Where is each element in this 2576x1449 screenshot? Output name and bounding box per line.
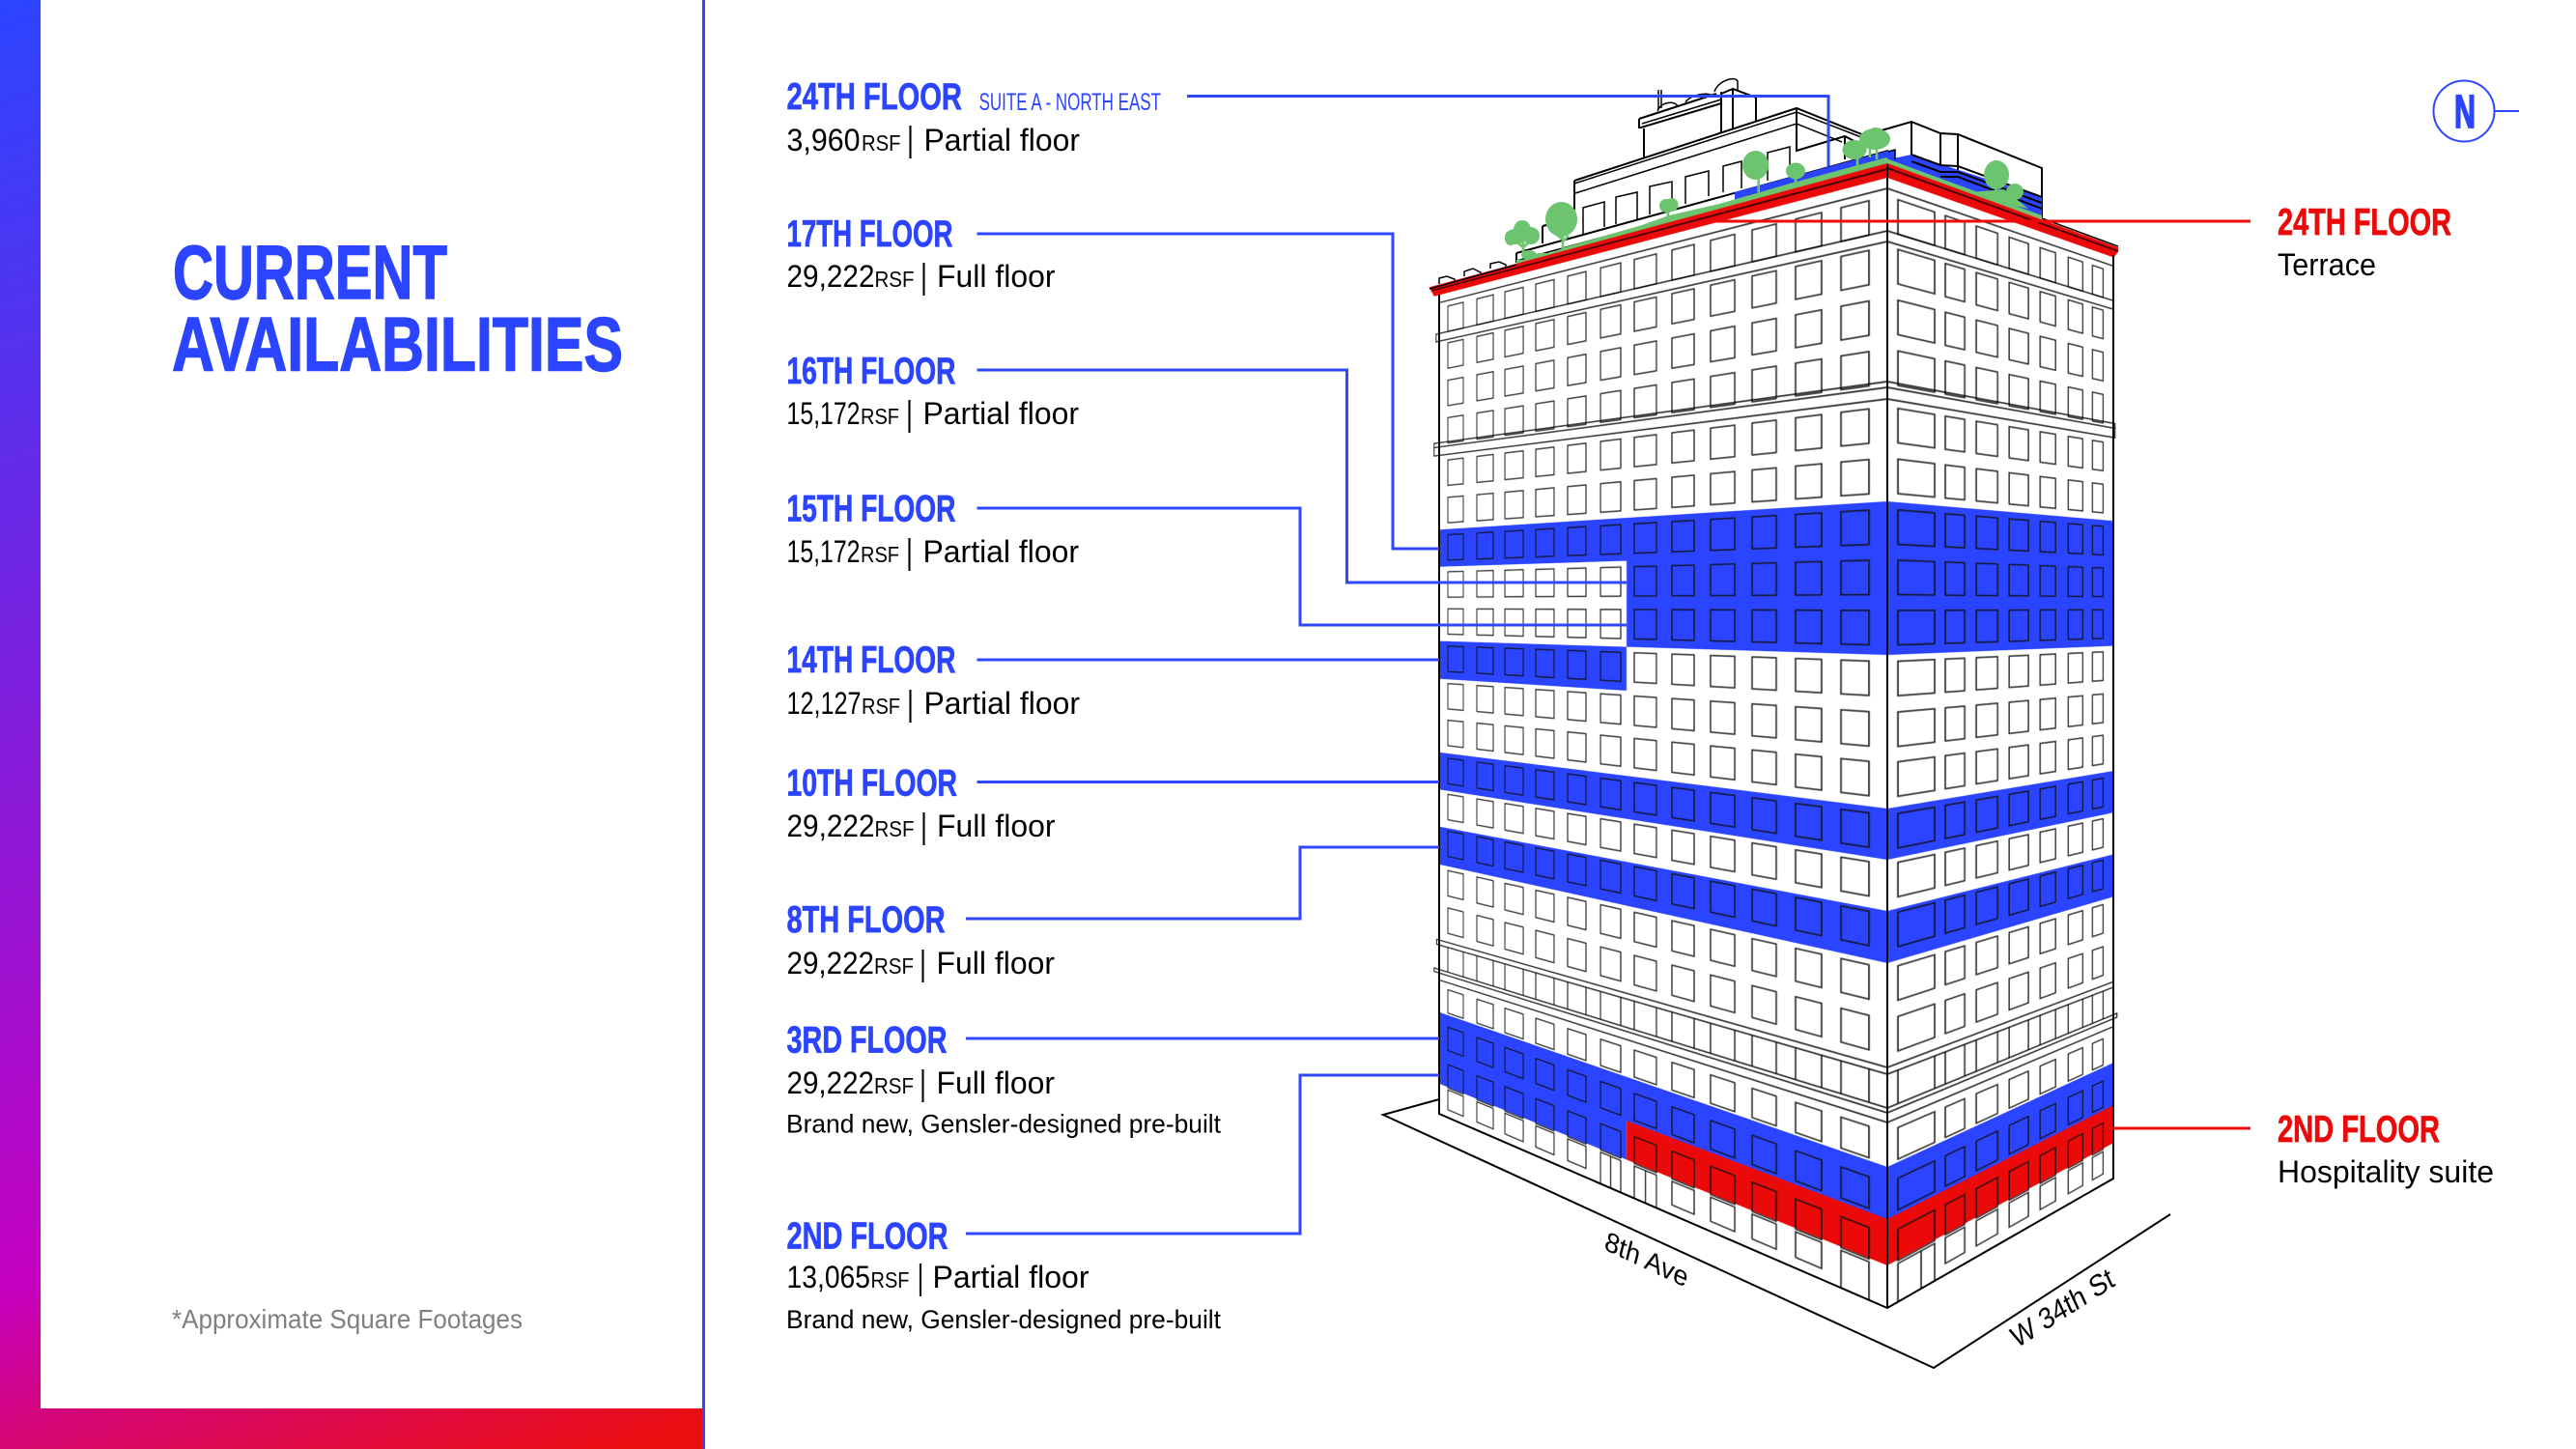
label: 15th floor xyxy=(786,489,1627,625)
3rd floor band xyxy=(1439,1012,1887,1219)
label: 10th floor: 10TH FLOOR xyxy=(786,763,957,804)
west facade (8th Ave) xyxy=(1430,162,1887,1300)
penthouse volume xyxy=(1516,108,1888,263)
ground plan outline xyxy=(1383,1099,2170,1368)
east facade (W 34th St) xyxy=(1887,162,2119,1302)
label: 2nd floor: RSF xyxy=(871,1267,910,1293)
icon: tree xyxy=(1843,140,1866,166)
label: 24th floor suite A xyxy=(786,76,1828,166)
gradient L-shaped frame xyxy=(0,0,703,1449)
2nd floor hospitality suite, red xyxy=(1887,1105,2113,1265)
label: 17th floor xyxy=(786,213,1439,549)
footnote: *Approximate Square Footages xyxy=(172,1304,523,1334)
label: 24th floor terrace xyxy=(1713,202,2451,282)
label: 10th floor: RSF xyxy=(875,816,914,841)
label: 24th floor terrace: Terrace xyxy=(2278,247,2376,282)
icon: tree xyxy=(1742,151,1769,192)
label: 2nd floor: Brand new, Gensler-designed pre-built xyxy=(786,1305,1222,1334)
24th floor suite A terrace, east xyxy=(1748,150,2042,216)
17th floor band xyxy=(1439,501,1887,567)
street label: 8th Ave: 8th Ave xyxy=(1602,1226,1691,1293)
label: 16th floor xyxy=(786,351,1627,582)
title: CURRENT xyxy=(173,229,447,315)
label: 3rd floor: RSF xyxy=(874,1073,914,1098)
icon: tree xyxy=(1545,202,1577,249)
icon: tree xyxy=(1859,128,1890,159)
label: 16th floor: RSF xyxy=(861,404,899,429)
label: 14th floor: 12,127 xyxy=(786,686,862,721)
label: 24th floor suite A: SUITE A - NORTH EAST xyxy=(979,89,1161,116)
west string courses xyxy=(1431,169,1887,1122)
label: 15th floor: Partial floor xyxy=(923,534,1079,569)
label: 8th floor: 29,222 xyxy=(786,946,874,980)
icon: tree xyxy=(1984,160,2009,198)
label: 3rd floor xyxy=(786,1020,1439,1138)
title xyxy=(172,229,623,386)
facade background xyxy=(1887,178,2113,1308)
label: 16th floor: 15,172 xyxy=(786,396,860,431)
label: 8th floor xyxy=(786,847,1439,982)
label: 2nd floor hospitality suite: Hospitality suite xyxy=(2278,1154,2494,1189)
2nd floor hospitality suite, red xyxy=(1627,1121,1887,1265)
14th floor partial band xyxy=(1439,641,1627,691)
label: 8th floor: RSF xyxy=(874,953,914,979)
label: 16th floor: Partial floor xyxy=(923,396,1079,431)
title: AVAILABILITIES xyxy=(172,301,623,386)
terrace parapet, red xyxy=(1430,163,1887,298)
label: 16th floor: 16TH FLOOR xyxy=(786,351,956,392)
label: 8th floor: 8TH FLOOR xyxy=(786,899,946,941)
icon: tree xyxy=(1659,198,1679,216)
east penthouse xyxy=(1882,122,2042,217)
west windows xyxy=(1448,201,1869,1300)
roof parapet boxes xyxy=(1439,262,1506,284)
label: 17th floor: 29,222 xyxy=(786,259,875,294)
label: 15th floor: RSF xyxy=(861,542,899,567)
building edges xyxy=(1439,164,2113,1308)
penthouse windows xyxy=(1583,147,1790,234)
icon: tree xyxy=(1786,162,1805,184)
label: 15th floor: 15TH FLOOR xyxy=(786,489,956,529)
east windows xyxy=(1898,200,2103,1302)
icon: north arrow xyxy=(2434,81,2519,141)
16th and 15th floor partial band xyxy=(1627,553,1887,655)
10th floor band xyxy=(1439,753,1887,860)
label: 10th floor xyxy=(786,763,1439,845)
label: 24th floor terrace: 24TH FLOOR xyxy=(2278,202,2451,243)
label: 10th floor: 29,222 xyxy=(786,809,875,843)
icon: tree xyxy=(1505,220,1540,260)
label: 3rd floor: Brand new, Gensler-designed pre-built xyxy=(786,1109,1222,1138)
vertical divider xyxy=(702,0,705,1449)
label: 14th floor: Partial floor xyxy=(923,686,1080,721)
label: 2nd floor: 13,065 xyxy=(786,1260,870,1294)
10th floor band xyxy=(1887,771,2113,860)
parapet top edge strokes xyxy=(1430,218,2118,289)
icon: north arrow: N xyxy=(2454,87,2476,138)
label: 24th floor suite A: Partial floor xyxy=(923,123,1080,157)
label: 15th floor: 15,172 xyxy=(786,534,860,569)
terrace parapet, red xyxy=(1887,163,2118,259)
label: 14th floor: RSF xyxy=(862,694,900,719)
label: 24th floor suite A: RSF xyxy=(862,130,900,156)
label: 17th floor: RSF xyxy=(875,267,914,292)
label: 2nd floor hospitality suite: 2ND FLOOR xyxy=(2278,1109,2440,1151)
17th to 15th floor band xyxy=(1887,501,2113,655)
label: 8th floor: Full floor xyxy=(937,946,1055,980)
label: 2nd floor hospitality suite xyxy=(2113,1109,2494,1189)
label: 14th floor: 14TH FLOOR xyxy=(786,639,956,681)
label: 24th floor suite A: 3,960 xyxy=(786,123,860,157)
label: 2nd floor: 2ND FLOOR xyxy=(786,1215,948,1258)
label: 3rd floor: 29,222 xyxy=(786,1065,874,1100)
label: 10th floor: Full floor xyxy=(937,809,1056,843)
label: 17th floor: Full floor xyxy=(937,259,1056,294)
label: 24th floor suite A: 24TH FLOOR xyxy=(786,76,962,118)
facade background xyxy=(1439,178,1887,1308)
24th floor suite A terrace, west xyxy=(1735,150,1895,201)
street label: W 34th St: W 34th St xyxy=(2006,1262,2119,1354)
mechanical tower xyxy=(1639,79,1756,157)
east string courses xyxy=(1887,168,2118,1122)
8th floor band xyxy=(1887,854,2113,963)
3rd floor band xyxy=(1887,1063,2113,1219)
8th floor band xyxy=(1439,827,1887,963)
label: 17th floor: 17TH FLOOR xyxy=(786,213,953,255)
label: 3rd floor: Full floor xyxy=(937,1065,1055,1100)
label: 14th floor xyxy=(786,639,1439,723)
label: 3rd floor: 3RD FLOOR xyxy=(786,1020,948,1061)
green roof strip xyxy=(1516,157,2042,267)
2nd floor blue portion xyxy=(1439,1050,1627,1159)
label: 2nd floor: Partial floor xyxy=(933,1260,1090,1294)
label: 2nd floor xyxy=(786,1075,1439,1334)
icon: tree xyxy=(2006,184,2024,205)
